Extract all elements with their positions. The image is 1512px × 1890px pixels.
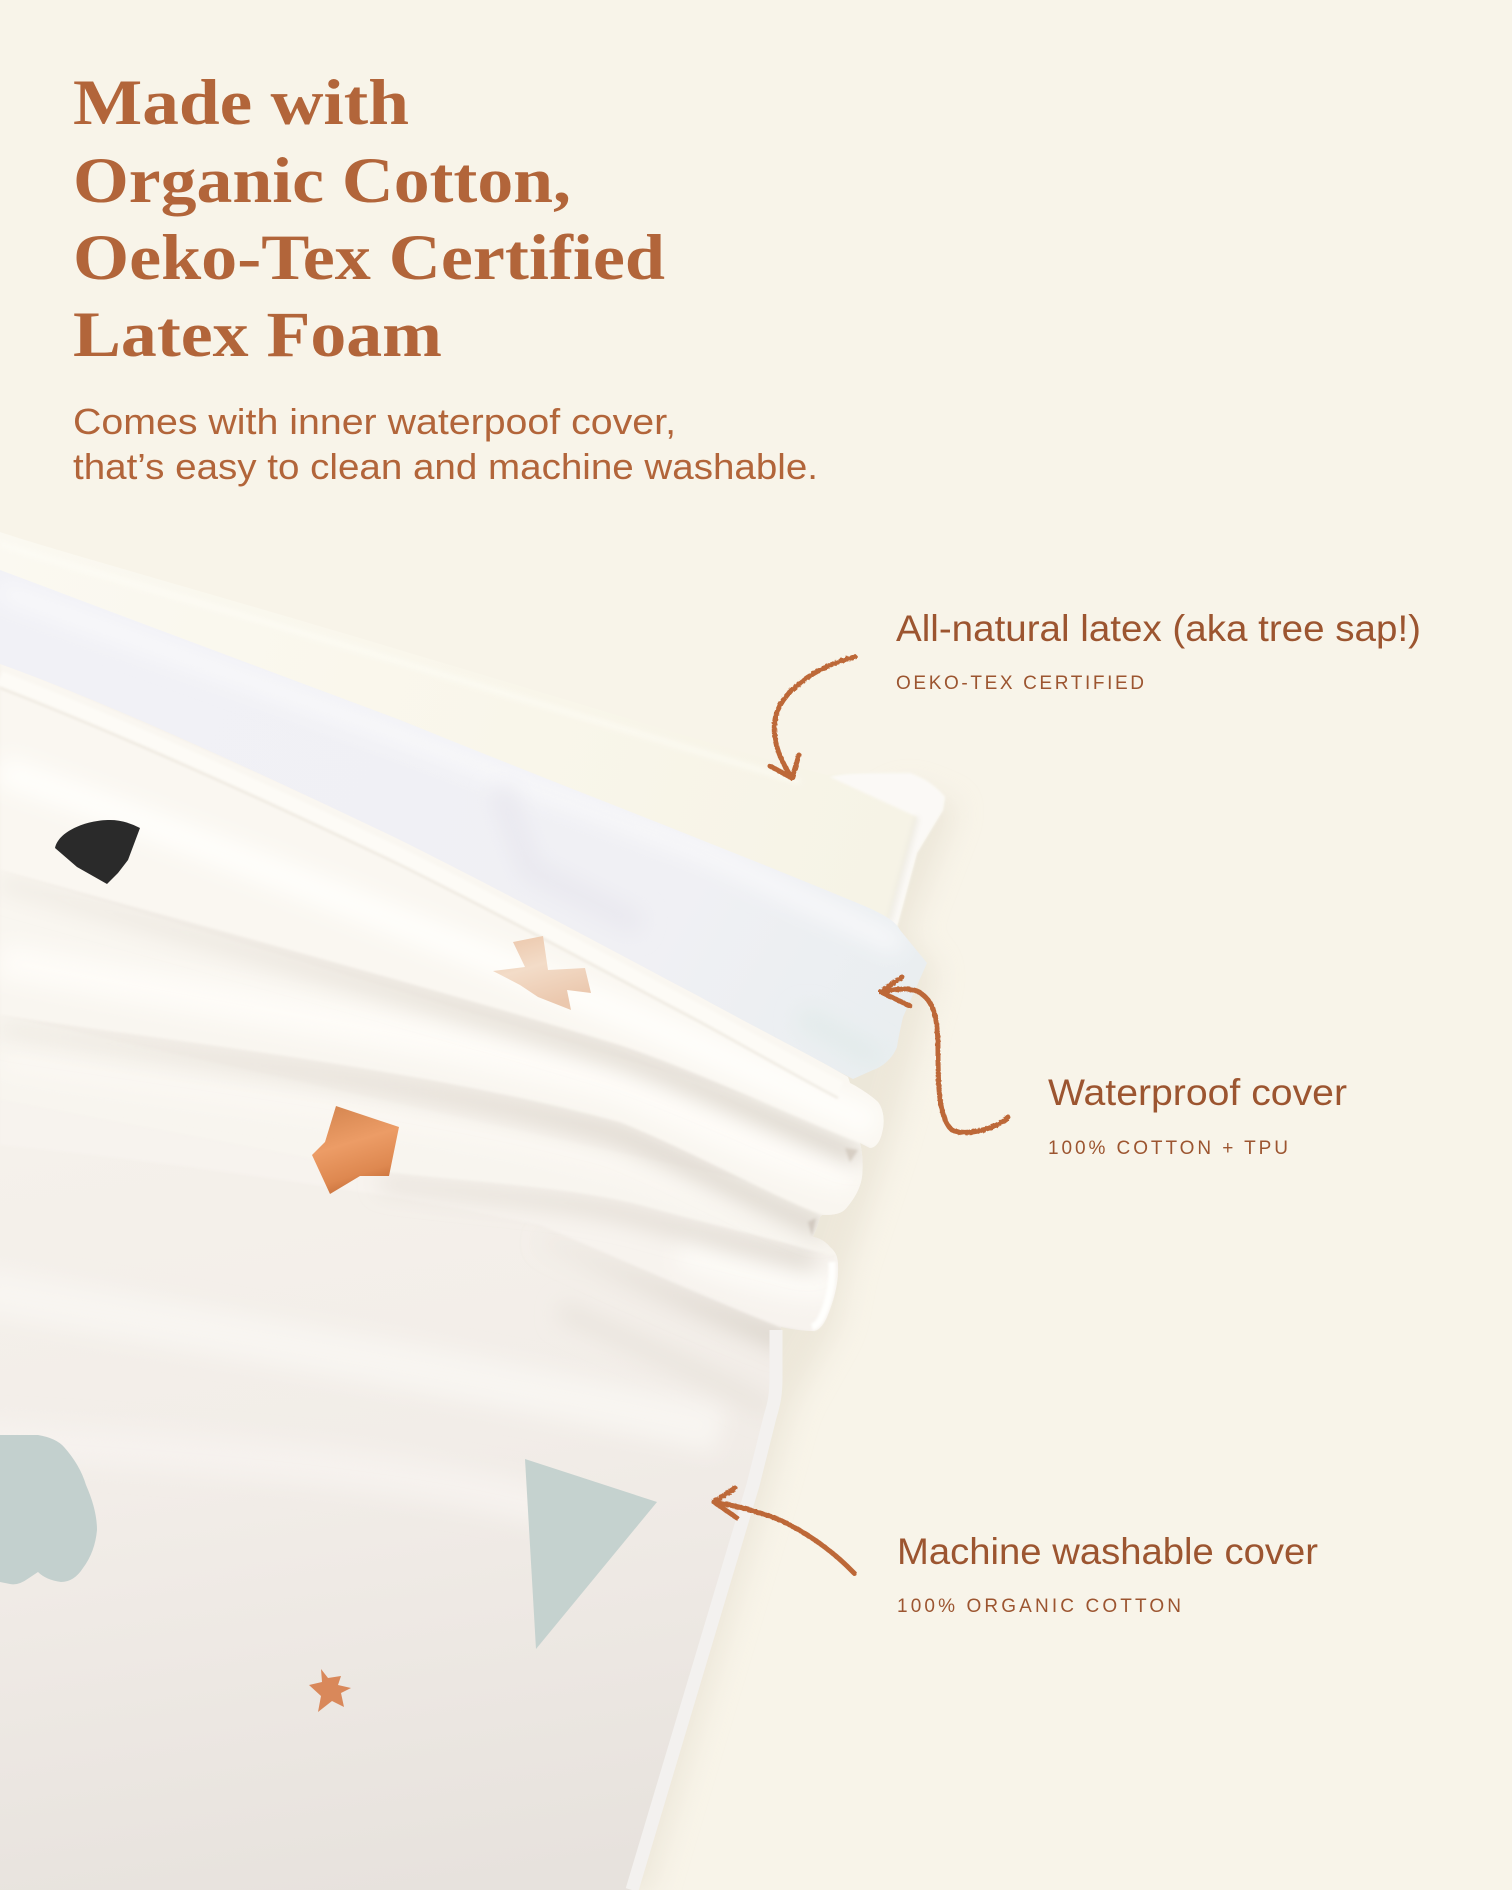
title: Made with: [73, 67, 409, 139]
piping edge: [632, 1330, 776, 1890]
waterproof cover layer: [0, 570, 927, 1079]
title: Latex Foam: [73, 299, 442, 371]
machine washable outer cover: [0, 660, 900, 1890]
callout: latex: All-natural latex (aka tree sap!): [896, 608, 1421, 649]
callout: machine washable cover: 100% ORGANIC COTTON: [897, 1596, 1181, 1617]
print: black semicircle: [55, 820, 140, 884]
latex foam layer: [0, 532, 945, 960]
print: teal triangle: [525, 1459, 657, 1649]
print: orange tag: [312, 1106, 399, 1194]
print: peach cross: [493, 936, 591, 1010]
product photo: layered mattress: [0, 532, 958, 1890]
print: teal blob: [0, 1435, 97, 1584]
callout: latex: [896, 608, 1421, 694]
title: Organic Cotton,: [73, 145, 571, 217]
arrow: to latex: [770, 657, 855, 778]
subtitle: Comes with inner waterpoof cover,: [73, 401, 676, 442]
print: orange star: [309, 1669, 351, 1712]
callout: machine washable cover: Machine washable cover: [897, 1531, 1318, 1572]
callout: waterproof cover: 100% COTTON + TPU: [1048, 1138, 1288, 1159]
arrow: to waterproof cover: [881, 977, 1008, 1132]
arrow: to washable cover: [714, 1488, 854, 1573]
callout: waterproof cover: Waterproof cover: [1048, 1072, 1347, 1113]
callout: latex: OEKO-TEX CERTIFIED: [896, 673, 1144, 694]
subtitle: [73, 401, 818, 487]
callout: waterproof cover: [1048, 1072, 1347, 1159]
title: Oeko-Tex Certified: [73, 222, 665, 294]
subtitle: that’s easy to clean and machine washable.: [73, 446, 818, 487]
callout: machine washable cover: [897, 1531, 1318, 1617]
title: [73, 67, 665, 371]
